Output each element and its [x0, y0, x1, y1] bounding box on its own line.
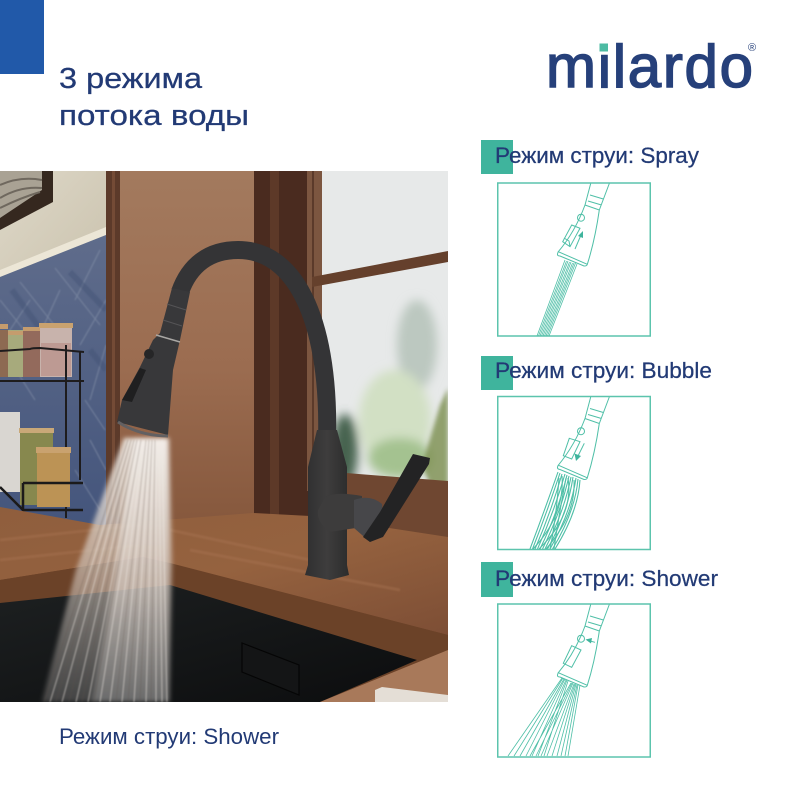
blue corner square: [0, 0, 44, 74]
title: [59, 63, 249, 132]
water stream: [42, 438, 172, 702]
shower head outline: [557, 604, 609, 687]
diagram frame: [498, 396, 650, 550]
bubble head outline: [557, 397, 609, 480]
photo: kitchen faucet in shower mode: [0, 171, 448, 702]
title: 3 режима: [59, 63, 203, 95]
faucet spout: [180, 250, 327, 440]
bubble jet lines: [530, 472, 580, 549]
blue herringbone tiles: [0, 235, 106, 530]
caption under photo: Режим струи: Shower: [59, 724, 280, 749]
shelf with jars: [0, 323, 84, 520]
wood post and wall panel: [106, 171, 322, 531]
wooden countertop: [0, 507, 448, 635]
wall and framed picture: [0, 171, 106, 277]
heading: Режим струи: Shower: [495, 566, 719, 591]
pull-out spray head: [117, 288, 190, 436]
panel: Bubble: [481, 356, 712, 550]
heading: Режим струи: Spray: [495, 143, 700, 168]
faucet body and handle: [305, 430, 430, 580]
teal marker square: [481, 562, 513, 597]
spray head outline: [557, 184, 609, 266]
window with trees: [312, 171, 448, 500]
diagram frame: [498, 604, 650, 757]
logo: milardo: ®: [748, 42, 756, 54]
panel: Spray: [481, 140, 700, 336]
black sink: [0, 585, 448, 702]
photo base tone: [0, 529, 448, 702]
teal marker square: [481, 356, 513, 390]
spray jet lines: [537, 260, 577, 336]
shower jet lines: [508, 678, 580, 756]
title: потока воды: [59, 100, 249, 132]
heading: Режим струи: Bubble: [495, 358, 712, 383]
sill and lower window panel: [347, 473, 448, 536]
teal marker square: [481, 140, 513, 174]
panel: Shower: [481, 562, 719, 757]
diagram frame: [498, 183, 650, 336]
logo: milardo: milardo: [546, 33, 753, 100]
